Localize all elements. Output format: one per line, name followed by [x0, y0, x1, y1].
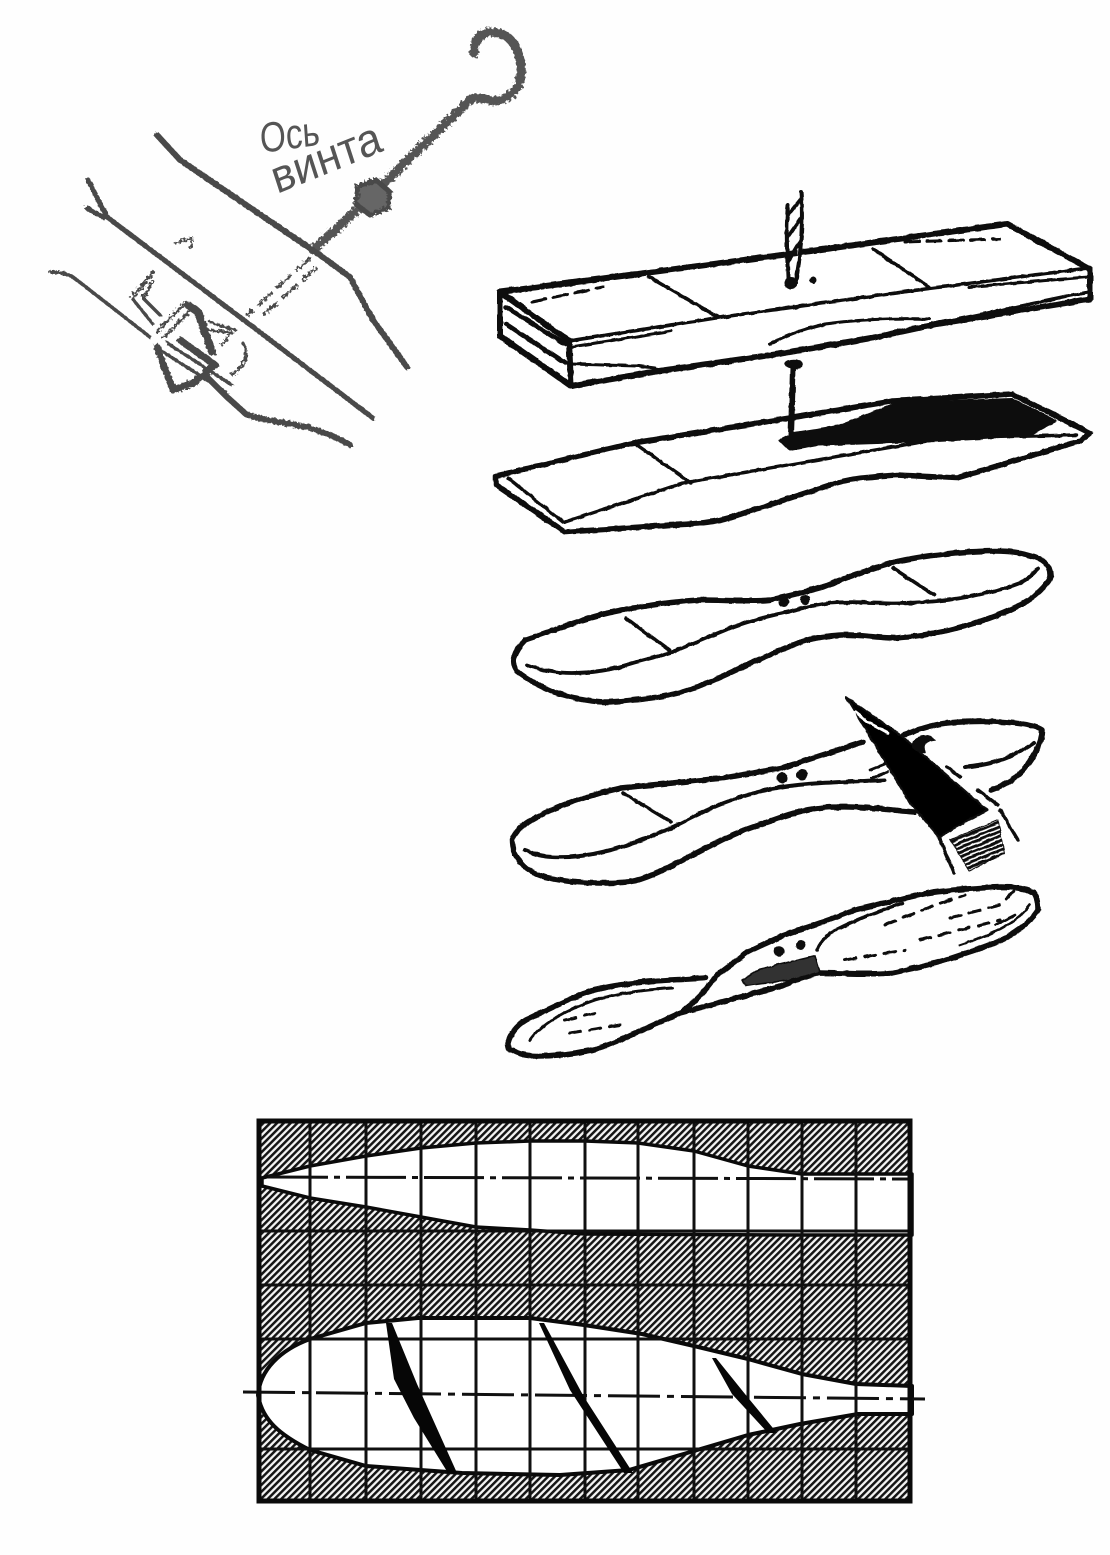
drawing: sawn blank with nail — [496, 360, 1090, 532]
hatched background — [258, 1120, 912, 1503]
chart: blade template on square grid — [243, 1120, 925, 1503]
block outline — [500, 224, 1090, 386]
shaded hub — [742, 956, 820, 986]
knife — [846, 697, 1018, 873]
drawing: finished carved blade — [508, 885, 1038, 1056]
frame — [259, 1121, 910, 1501]
drilled holes — [777, 770, 807, 783]
wood grain — [565, 885, 1020, 1033]
drilled holes — [774, 940, 806, 956]
blank outline — [496, 394, 1090, 532]
dashed axis line — [247, 258, 316, 316]
drawing: blade being carved with knife — [512, 697, 1042, 883]
label: propeller axis: Ось — [258, 107, 321, 162]
fuselage outlines — [50, 135, 407, 445]
blackened shaded side — [780, 399, 1056, 450]
label: propeller axis: винта — [264, 110, 388, 204]
rubber hook bracket and fitting — [132, 238, 246, 392]
nut on shaft — [356, 180, 390, 215]
blade outline — [513, 551, 1050, 702]
top view of blade — [262, 1141, 912, 1235]
blade outline — [508, 887, 1038, 1056]
center lines — [243, 1177, 925, 1399]
grid lines — [260, 1122, 910, 1500]
blade outline — [512, 721, 1042, 883]
drawing: laminated block and drill — [500, 192, 1090, 386]
hook shaft — [313, 32, 521, 250]
drilled holes — [780, 596, 810, 606]
drill bit — [785, 192, 816, 288]
blade cross sections — [386, 1323, 777, 1473]
drawing: blade cut to outline — [513, 551, 1050, 702]
side view of blade — [258, 1318, 912, 1475]
nail — [786, 360, 802, 436]
sketch: propeller shaft mounted on fuselage — [50, 32, 521, 445]
